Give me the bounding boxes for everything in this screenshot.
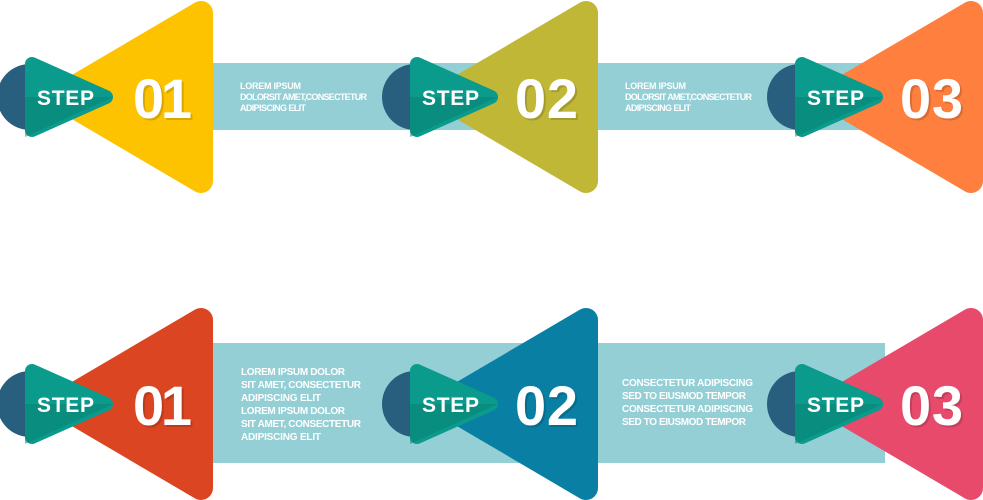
step 2 row 1 [382, 13, 586, 181]
step 2 row 2: STEP [422, 394, 479, 417]
step 3 row 2: 03 [902, 376, 965, 439]
text block: row 1 step 1: DOLORSIT AMET,CONSECTETUR [240, 92, 368, 102]
text block: row 1 step 1: LOREM IPSUM [240, 81, 301, 91]
step 3 row 2: STEP [807, 394, 864, 417]
text block: row 2 step 2 [622, 378, 753, 428]
text block: row 2 step 1: SIT AMET, CONSECTETUR [241, 380, 362, 391]
bar: row 1 [205, 63, 885, 130]
text block: row 2 step 1: LOREM IPSUM DOLOR [241, 367, 346, 378]
step 1 row 1: 01 [133, 67, 192, 130]
text block: row 2 step 1: LOREM IPSUM DOLOR [241, 406, 346, 417]
step 3 row 1: 03 [900, 67, 963, 130]
text block: row 2 step 1: ADIPISCING ELIT [241, 432, 321, 443]
step 3 row 2: 03 [900, 374, 963, 437]
step 2 row 2 [382, 320, 586, 488]
step 1 row 1: 01 [135, 69, 194, 132]
step 2 row 1: 02 [517, 69, 580, 132]
text block: row 1 step 2: DOLORSIT AMET,CONSECTETUR [625, 92, 752, 102]
text block: row 2 step 1: SIT AMET, CONSECTETUR [241, 419, 362, 430]
step 2 row 1: STEP [422, 87, 479, 110]
step 3 row 1: STEP [807, 87, 864, 110]
step 1 row 2: 01 [135, 376, 194, 439]
text block: row 2 step 2: CONSECTETUR ADIPISCING [622, 378, 753, 389]
step 1 row 2: 01 [133, 374, 192, 437]
step 3 row 2 [767, 320, 971, 488]
step 2 row 2: 02 [515, 374, 578, 437]
bar: row 2 [205, 343, 885, 463]
step 2 row 2: 02 [517, 376, 580, 439]
text block: row 1 step 1: ADIPISCING ELIT [240, 103, 306, 113]
step 3 row 1 [767, 13, 971, 181]
text block: row 2 step 2: SED TO EIUSMOD TEMPOR [622, 417, 747, 428]
text block: row 1 step 2 [625, 81, 752, 113]
step 1 row 1 [0, 13, 201, 181]
step 3 row 1: 03 [902, 69, 965, 132]
text block: row 1 step 2: ADIPISCING ELIT [625, 103, 692, 113]
text block: row 1 step 2: LOREM IPSUM [625, 81, 686, 91]
text block: row 1 step 1 [240, 81, 368, 113]
text block: row 2 step 2: CONSECTETUR ADIPISCING [622, 404, 753, 415]
text block: row 2 step 2: SED TO EIUSMOD TEMPOR [622, 391, 747, 402]
text block: row 2 step 1: ADIPISCING ELIT [241, 393, 321, 404]
step 1 row 2 [0, 320, 201, 488]
text block: row 2 step 1 [241, 367, 362, 443]
step 1 row 1: STEP [37, 87, 94, 110]
step 1 row 2: STEP [37, 394, 94, 417]
step 2 row 1: 02 [515, 67, 578, 130]
